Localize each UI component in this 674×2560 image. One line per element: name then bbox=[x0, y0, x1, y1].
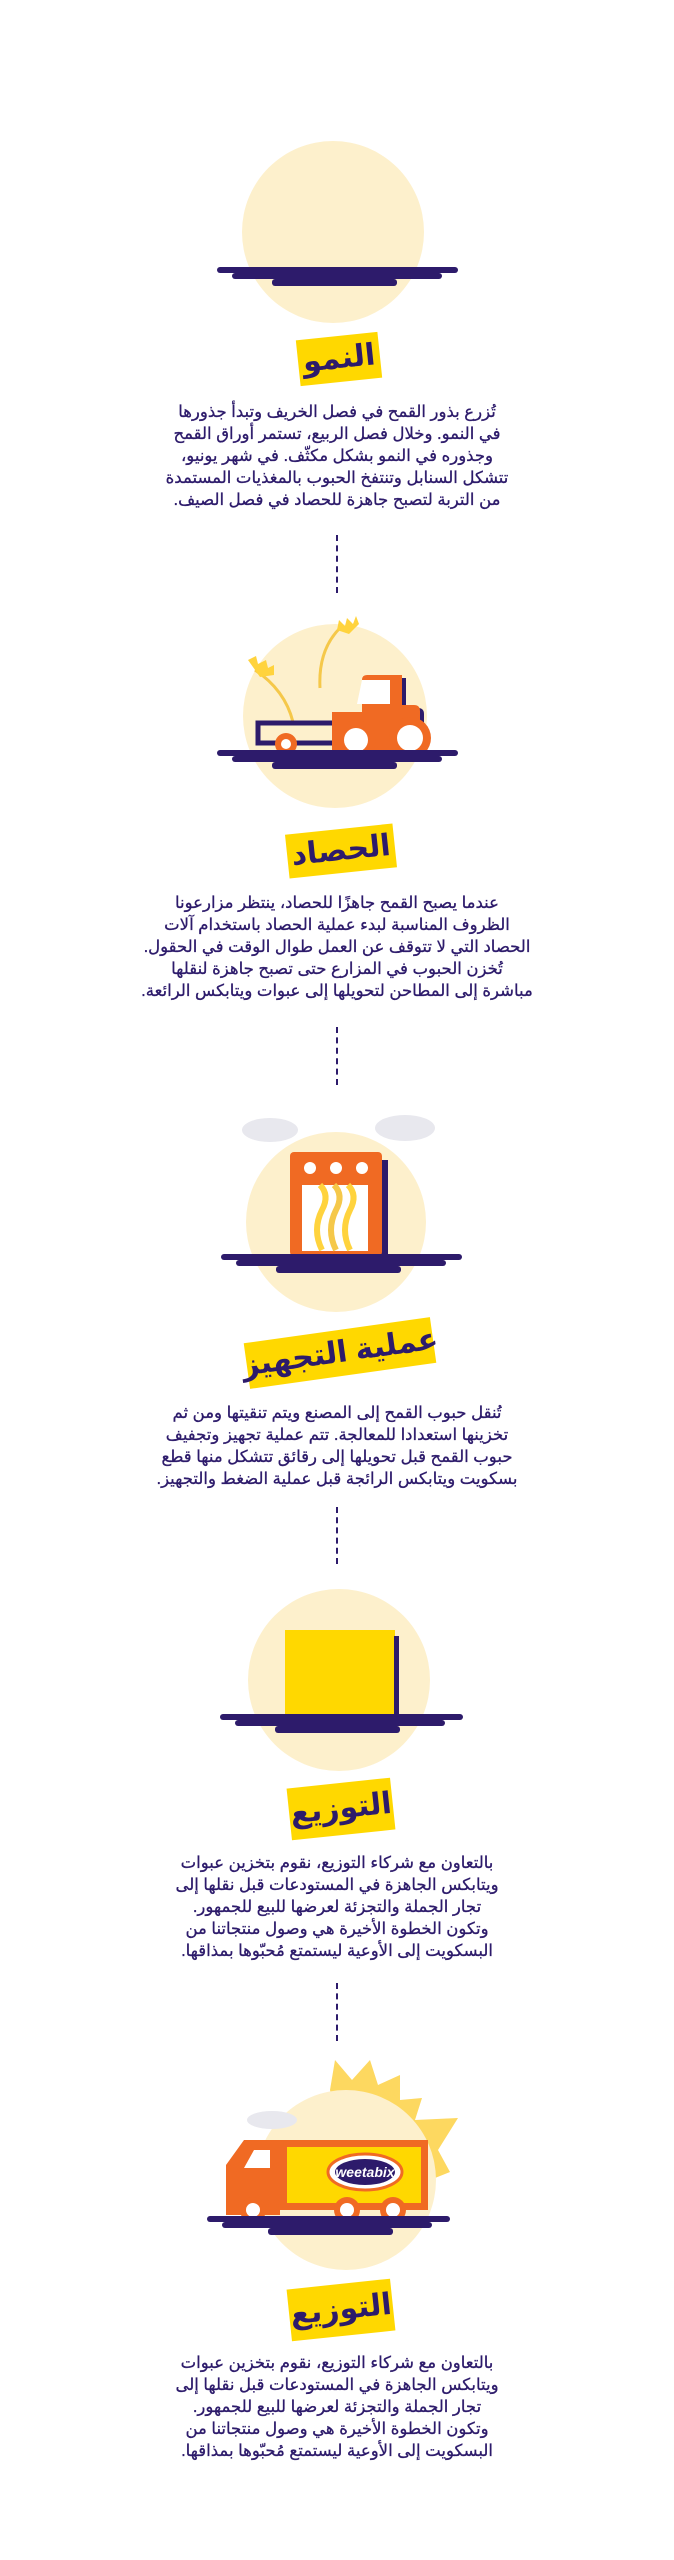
icon: truck with sun bbox=[207, 2060, 458, 2270]
text: growth: في النمو. وخلال فصل الربيع، تستمر أوراق القمح bbox=[173, 425, 501, 443]
text: processing: تخزينها استعدادا للمعالجة. تتم عملية تجهيز وتجفيف bbox=[166, 1426, 508, 1444]
text: growth: وجذوره في النمو بشكل مكثّف. في شهر يونيو، bbox=[181, 447, 493, 465]
arrow: dashed connector 1 bbox=[336, 535, 338, 593]
text: harvest: عندما يصبح القمح جاهزًا للحصاد، ينتظر مزارعونا bbox=[175, 894, 499, 912]
title: growth bbox=[296, 332, 382, 386]
text: distribution: ويتابكس الجاهزة في المستودعات قبل نقلها إلى bbox=[175, 1876, 499, 1894]
arrow: dashed connector 3 bbox=[336, 1507, 338, 1564]
title: processing: عملية التجهيز bbox=[240, 1322, 440, 1383]
text: distribution 2: البسكويت إلى الأوعية ليستمتع مُحبّوها بمذاقها. bbox=[181, 2442, 493, 2460]
text: processing: بسكويت ويتابكس الرائجة قبل عملية الضغط والتجهيز. bbox=[156, 1470, 518, 1488]
text: harvest: الحصاد التي لا تتوقف عن العمل طوال الوقت في الحقول. bbox=[144, 938, 530, 956]
title: distribution 2 bbox=[287, 2279, 395, 2341]
text: distribution: تجار الجملة والتجزئة لعرضها للبيع للجمهور. bbox=[193, 1898, 481, 1916]
icon: truck with sun: weetabix bbox=[335, 2164, 396, 2180]
text: distribution: بالتعاون مع شركاء التوزيع، نقوم بتخزين عبوات bbox=[181, 1854, 493, 1872]
title: harvest: الحصاد bbox=[290, 829, 392, 872]
text: distribution 2: بالتعاون مع شركاء التوزيع، نقوم بتخزين عبوات bbox=[181, 2354, 493, 2372]
text: distribution 2: تجار الجملة والتجزئة لعرضها للبيع للجمهور. bbox=[193, 2398, 481, 2416]
title: growth: النمو bbox=[301, 338, 377, 379]
text: distribution: وتكون الخطوة الأخيرة هي وصول منتجاتنا من bbox=[185, 1920, 489, 1938]
text: harvest: مباشرة إلى المطاحن لتحويلها إلى عبوات ويتابكس الرائعة. bbox=[141, 982, 533, 1000]
title: distribution bbox=[287, 1778, 395, 1840]
text: distribution 2: ويتابكس الجاهزة في المستودعات قبل نقلها إلى bbox=[175, 2376, 499, 2394]
text: processing bbox=[156, 1404, 518, 1488]
title: distribution: التوزيع bbox=[289, 1787, 393, 1830]
text: processing: تُنقل حبوب القمح إلى المصنع ويتم تنقيتها ومن ثم bbox=[172, 1404, 502, 1422]
text: distribution 2: وتكون الخطوة الأخيرة هي وصول منتجاتنا من bbox=[185, 2420, 489, 2438]
text: growth: تتشكل السنابل وتنتفخ الحبوب بالمغذيات المستمدة bbox=[166, 469, 508, 487]
icon: growth ground bbox=[217, 141, 458, 323]
icon: box distribution bbox=[220, 1589, 463, 1771]
arrow: dashed connector 2 bbox=[336, 1027, 338, 1085]
text: growth bbox=[166, 400, 508, 510]
arrow: dashed connector 4 bbox=[336, 1983, 338, 2041]
icon: tractor harvest bbox=[217, 616, 458, 808]
text: harvest bbox=[141, 894, 533, 1000]
text: processing: حبوب القمح قبل تحويلها إلى رقائق تتشكل منها قطع bbox=[161, 1448, 513, 1466]
text: distribution 2 bbox=[175, 2354, 499, 2460]
text: distribution: البسكويت إلى الأوعية ليستمتع مُحبّوها بمذاقها. bbox=[181, 1942, 493, 1960]
title: distribution 2: التوزيع bbox=[289, 2288, 393, 2331]
text: harvest: تُخزن الحبوب في المزارع حتى تصبح جاهزة لنقلها bbox=[171, 960, 503, 978]
text: growth: من التربة لتصبح جاهزة للحصاد في فصل الصيف. bbox=[174, 491, 500, 509]
icon: oven processing bbox=[221, 1115, 462, 1312]
text: distribution bbox=[175, 1854, 499, 1960]
text: growth: تُزرع بذور القمح في فصل الخريف وتبدأ جذورها bbox=[178, 403, 496, 421]
text: harvest: الظروف المناسبة لبدء عملية الحصاد باستخدام آلات bbox=[164, 916, 510, 934]
